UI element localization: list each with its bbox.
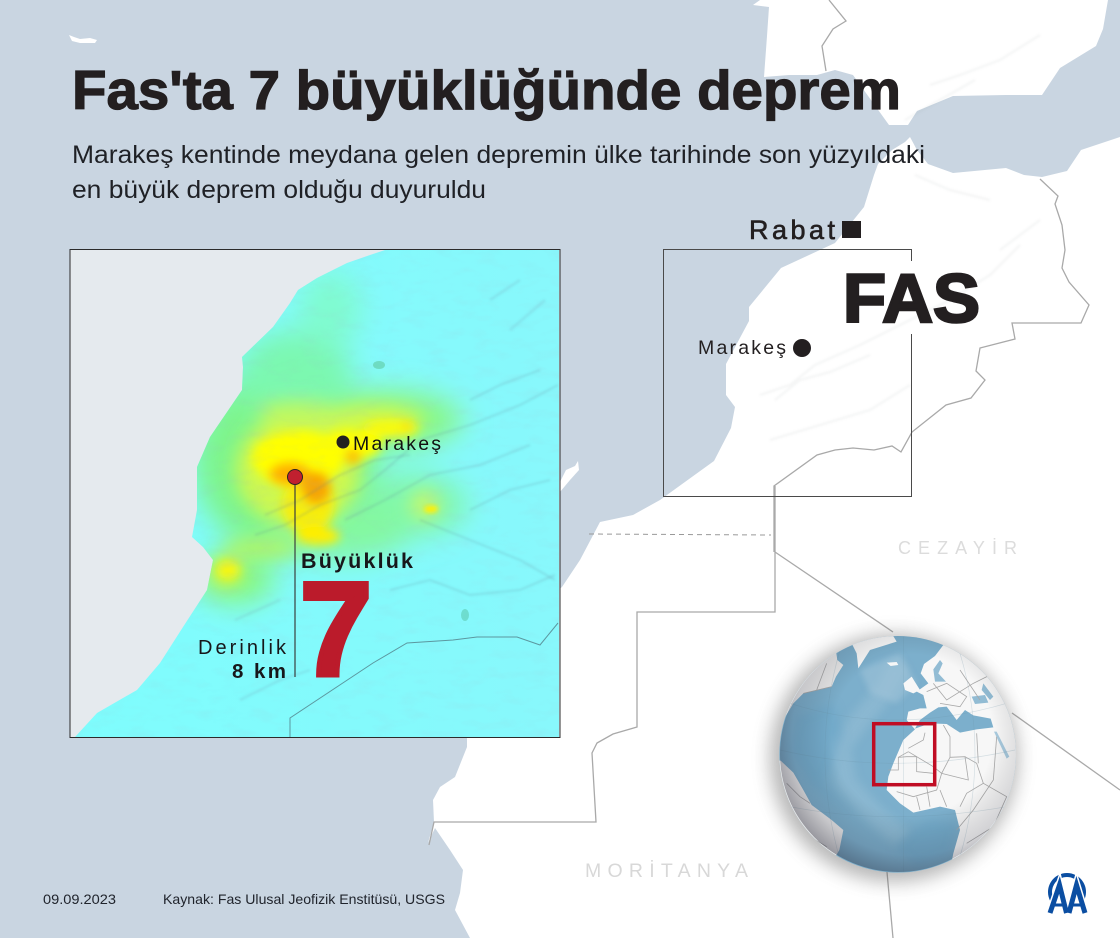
depth label — [198, 637, 287, 683]
label: Rabat: Rabat — [749, 215, 835, 245]
icon: Anadolu Agency logo — [1050, 875, 1085, 913]
panel frame — [70, 250, 560, 738]
epicentre pointer — [288, 470, 302, 677]
label: Moritanya: MORİTANYA — [585, 859, 748, 882]
globe ocean — [773, 633, 1027, 877]
globe locator — [770, 633, 1033, 882]
terrain ridges — [255, 370, 558, 595]
subtitle: en büyük deprem olduğu duyuruldu — [72, 176, 486, 204]
label: Cezayir: CEZAYİR — [898, 538, 1017, 558]
inland seas — [915, 707, 993, 733]
globe borders — [787, 663, 1007, 847]
date: 09.09.2023 — [43, 891, 116, 907]
red locator square — [874, 724, 935, 785]
panel land with intensity heat — [70, 249, 560, 738]
subtitle — [72, 141, 925, 204]
label: Marakeş on locator: Marakeş — [698, 337, 786, 359]
label: FAS: FAS — [843, 260, 980, 337]
terrain texture — [223, 412, 400, 567]
title: Fas'ta 7 büyüklüğünde deprem — [72, 59, 901, 121]
magnitude label: Büyüklük — [301, 549, 413, 573]
Marrakesh marker: Marakeş — [353, 433, 441, 455]
depth label: Derinlik — [198, 637, 287, 659]
panel: shake intensity map — [70, 249, 560, 738]
terrain hillshade — [760, 35, 1040, 440]
globe land — [780, 636, 1016, 860]
country borders — [429, 0, 1120, 938]
subtitle: Marakeş kentinde meydana gelen depremin ülke tarihinde son yüzyıldaki — [72, 141, 925, 169]
sphere shading — [780, 636, 1016, 872]
magnitude value: 7 — [300, 556, 372, 704]
globe graticule — [790, 637, 1015, 857]
inset locator frame — [664, 250, 912, 496]
depth label: 8 km — [232, 660, 286, 683]
source: Kaynak: Fas Ulusal Jeofizik Enstitüsü, USGS — [163, 891, 445, 907]
